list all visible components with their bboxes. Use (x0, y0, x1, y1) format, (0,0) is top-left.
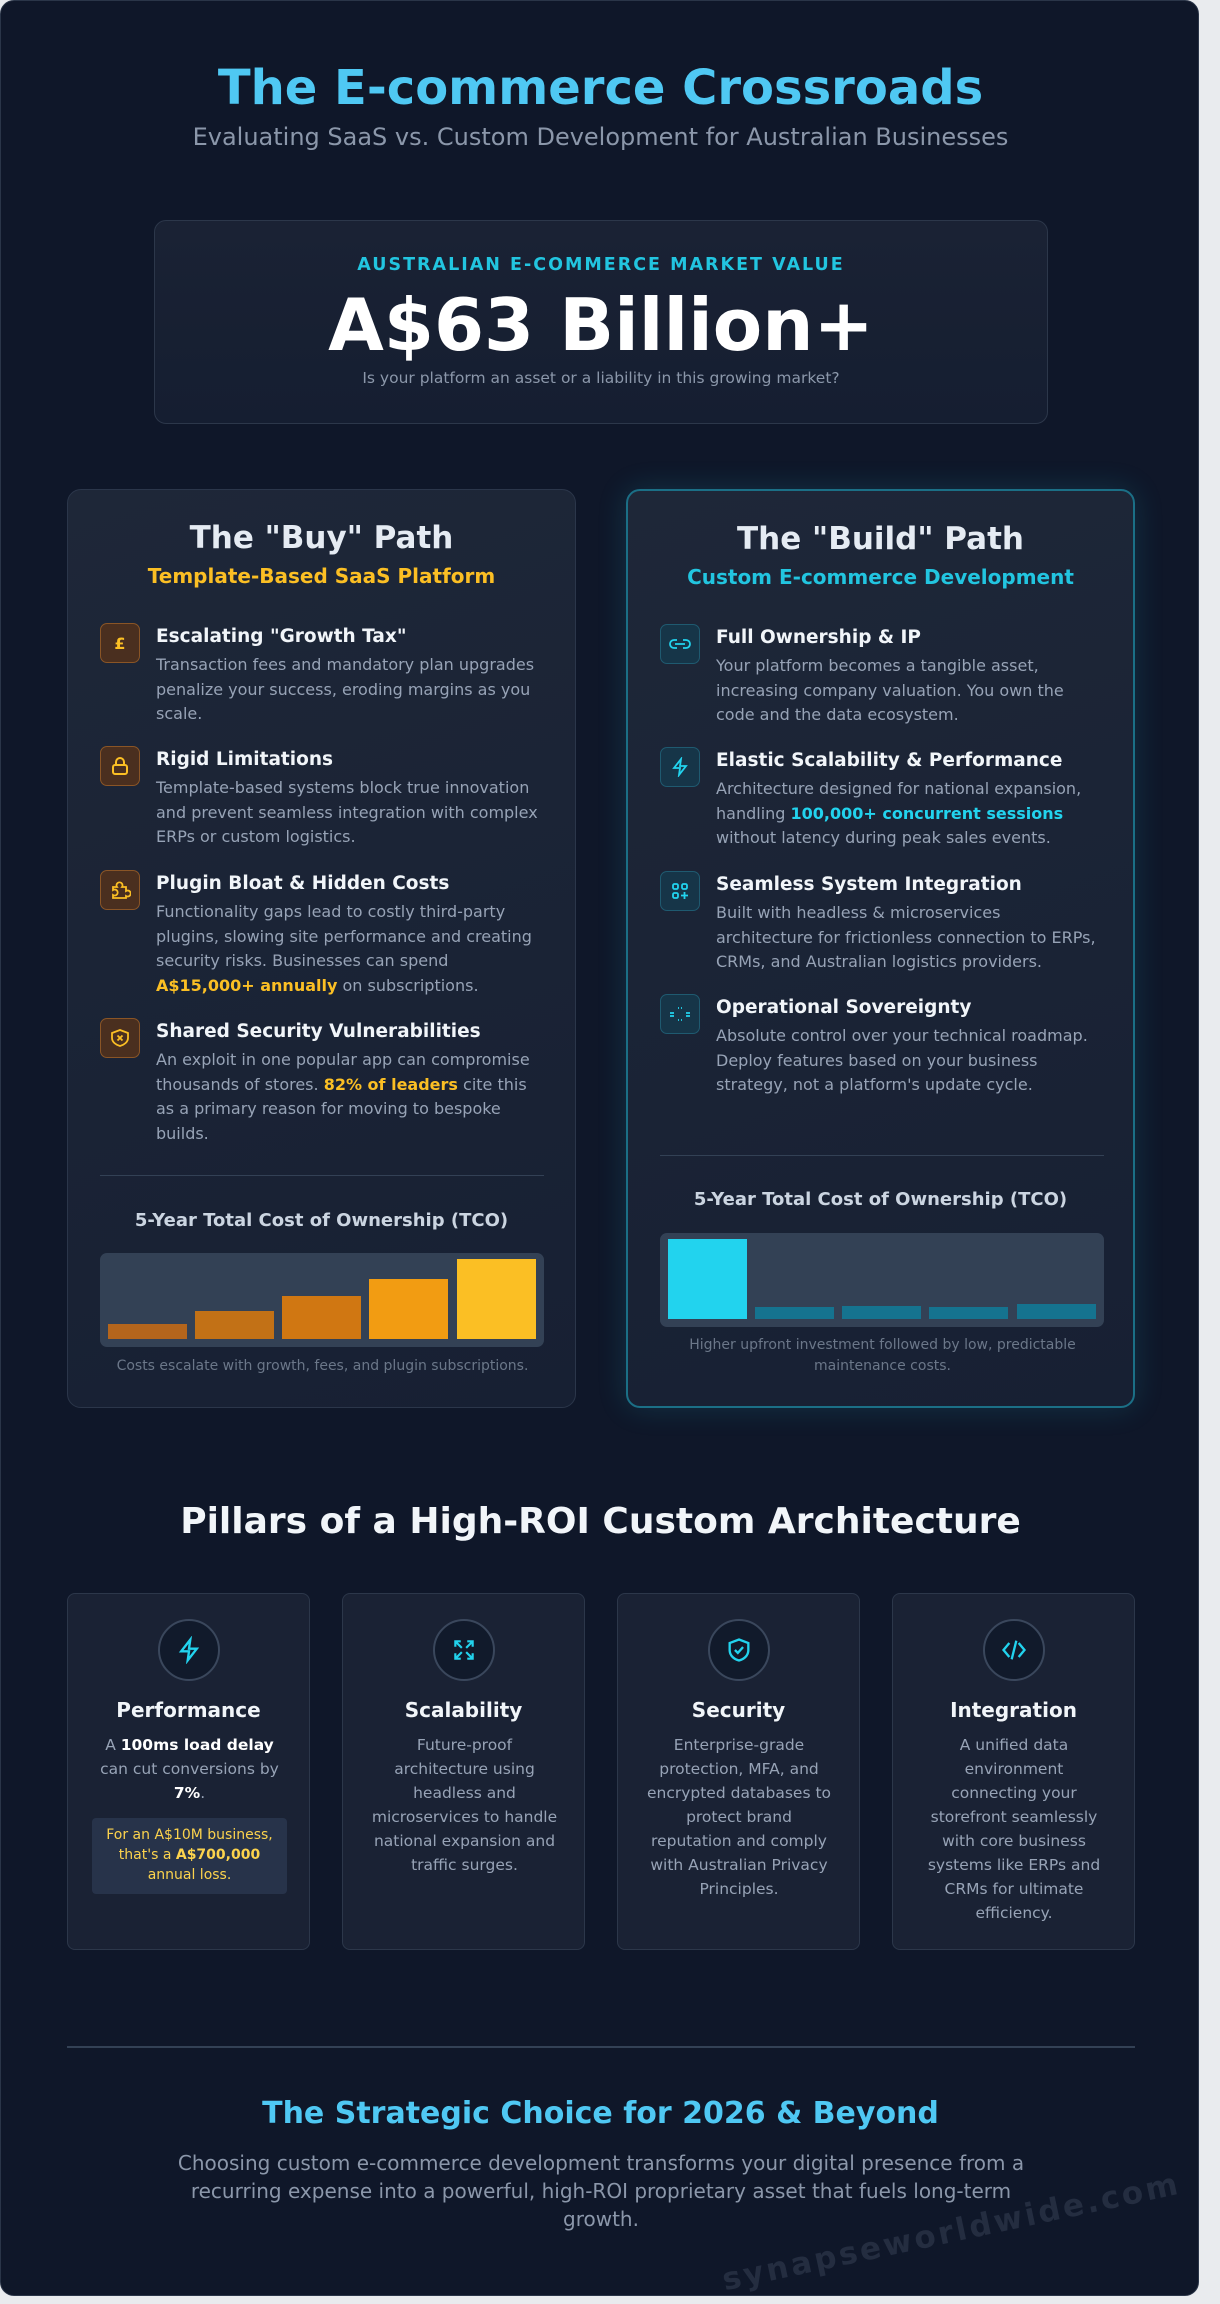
buy subtitle: Template-Based SaaS Platform (148, 564, 495, 588)
pillar: performance: Performance (116, 1698, 261, 1722)
item: growth tax: Escalating "Growth Tax" (156, 626, 406, 647)
item: shared security: An exploit in one popular app can compromise thousands of stores. 82% of leaders cite this as a primary reason for moving to bespoke builds. (156, 1050, 530, 1142)
big number: A$63 Billion+ (328, 283, 874, 367)
icon: shield check (708, 1619, 770, 1681)
pillar: scalability (342, 1593, 585, 1950)
item: ownership: Full Ownership & IP (716, 627, 921, 648)
panel: buy path (67, 489, 576, 1408)
item: ownership: Your platform becomes a tangible asset, increasing company valuation. You own the code and the data ecosystem. (716, 656, 1064, 724)
panel: build path (626, 489, 1135, 1408)
item: scalability: Architecture designed for national expansion, handling 100,000+ concurrent sessions without latency during peak sales events. (716, 779, 1081, 847)
icon: expand (433, 1619, 495, 1681)
market label: AUSTRALIAN E-COMMERCE MARKET VALUE (357, 255, 845, 275)
item: shared security: Shared Security Vulnerabilities (156, 1021, 481, 1042)
caption buy: Costs escalate with growth, fees, and plugin subscriptions. (117, 1358, 528, 1374)
item: sovereignty (660, 994, 1088, 1094)
item: ownership (660, 624, 1064, 724)
item: integration (660, 871, 1096, 971)
pillar: security: Enterprise-grade protection, MFA, and encrypted databases to protect brand reputation and comply with Australian Privacy Principles. (647, 1736, 831, 1898)
icon: code (983, 1619, 1045, 1681)
item: rigid limitations: Template-based systems block true innovation and prevent seamless integration with complex ERPs or custom logistics. (156, 778, 538, 846)
title: The E-commerce Crossroads (218, 60, 983, 116)
callout: annual loss: For an A$10M business, that's a A$700,000 annual loss. (106, 1827, 273, 1883)
watermark: synapseworldwide.com (719, 2166, 1184, 2296)
pillar: integration: A unified data environment connecting your storefront seamlessly with core business systems like ERPs and CRMs for ultimate efficiency. (928, 1736, 1100, 1922)
pillar: performance (67, 1593, 310, 1950)
market value box (154, 220, 1048, 424)
item: integration: Built with headless & microservices architecture for frictionless connection to ERPs, CRMs, and Australian logistics providers. (716, 903, 1096, 971)
item: sovereignty: Absolute control over your technical roadmap. Deploy features based on your business strategy, not a platform's update cycle. (716, 1026, 1088, 1094)
item: plugin bloat: Plugin Bloat & Hidden Costs (156, 873, 449, 894)
item: plugin bloat: Functionality gaps lead to costly third-party plugins, slowing site performance and creating security risks. Businesses can spend A$15,000+ annually on subscriptions. (156, 902, 532, 994)
icon: grid plus (660, 871, 700, 911)
item: scalability (660, 747, 1081, 847)
icon: bolt (660, 747, 700, 787)
item: scalability: Elastic Scalability & Performance (716, 750, 1062, 771)
item: rigid limitations: Rigid Limitations (156, 749, 333, 770)
item: rigid limitations (100, 746, 538, 846)
market question: Is your platform an asset or a liability in this growing market? (362, 369, 840, 387)
item: integration: Seamless System Integration (716, 874, 1022, 895)
buy title: The "Buy" Path (190, 520, 453, 556)
pillars heading: Pillars of a High-ROI Custom Architecture (180, 1501, 1021, 1542)
pillar: scalability: Future-proof architecture using headless and microservices to handle national expansion and traffic surges. (372, 1736, 557, 1874)
icon: lock (100, 746, 140, 786)
pillar: performance: A 100ms load delay can cut conversions by 7%. (100, 1736, 279, 1802)
item: growth tax: Transaction fees and mandatory plan upgrades penalize your success, eroding margins as you scale. (156, 655, 534, 723)
pillar: security: Security (692, 1698, 785, 1722)
icon: bolt circle (158, 1619, 220, 1681)
pillar: security (617, 1593, 860, 1950)
caption build: Higher upfront investment followed by low, predictable maintenance costs. (689, 1337, 1076, 1374)
item: shared security (100, 1018, 530, 1142)
build title: The "Build" Path (737, 521, 1024, 557)
conclusion heading: The Strategic Choice for 2026 & Beyond (262, 2096, 939, 2131)
icon: coin: £ (114, 634, 126, 652)
bar chart: build tco (660, 1233, 1104, 1327)
pillar: integration: Integration (950, 1698, 1077, 1722)
item: growth tax (100, 623, 534, 723)
icon: dashes (660, 994, 700, 1034)
build subtitle: Custom E-commerce Development (687, 565, 1074, 589)
pillar: integration (892, 1593, 1135, 1950)
tco heading build: 5-Year Total Cost of Ownership (TCO) (694, 1189, 1067, 1210)
icon: coin (100, 623, 140, 663)
conclusion text: Choosing custom e-commerce development transforms your digital presence from a recurring expense into a powerful, high-ROI proprietary asset that fuels long-term growth. (178, 2151, 1024, 2231)
pillar: scalability: Scalability (405, 1698, 522, 1722)
icon: puzzle (100, 870, 140, 910)
subtitle: Evaluating SaaS vs. Custom Development for Australian Businesses (193, 123, 1008, 151)
item: sovereignty: Operational Sovereignty (716, 997, 971, 1018)
bar chart: buy tco (100, 1253, 544, 1347)
callout: annual loss (92, 1818, 287, 1894)
item: plugin bloat (100, 870, 532, 994)
icon: link (660, 624, 700, 664)
tco heading buy: 5-Year Total Cost of Ownership (TCO) (135, 1210, 508, 1231)
icon: shield x (100, 1018, 140, 1058)
